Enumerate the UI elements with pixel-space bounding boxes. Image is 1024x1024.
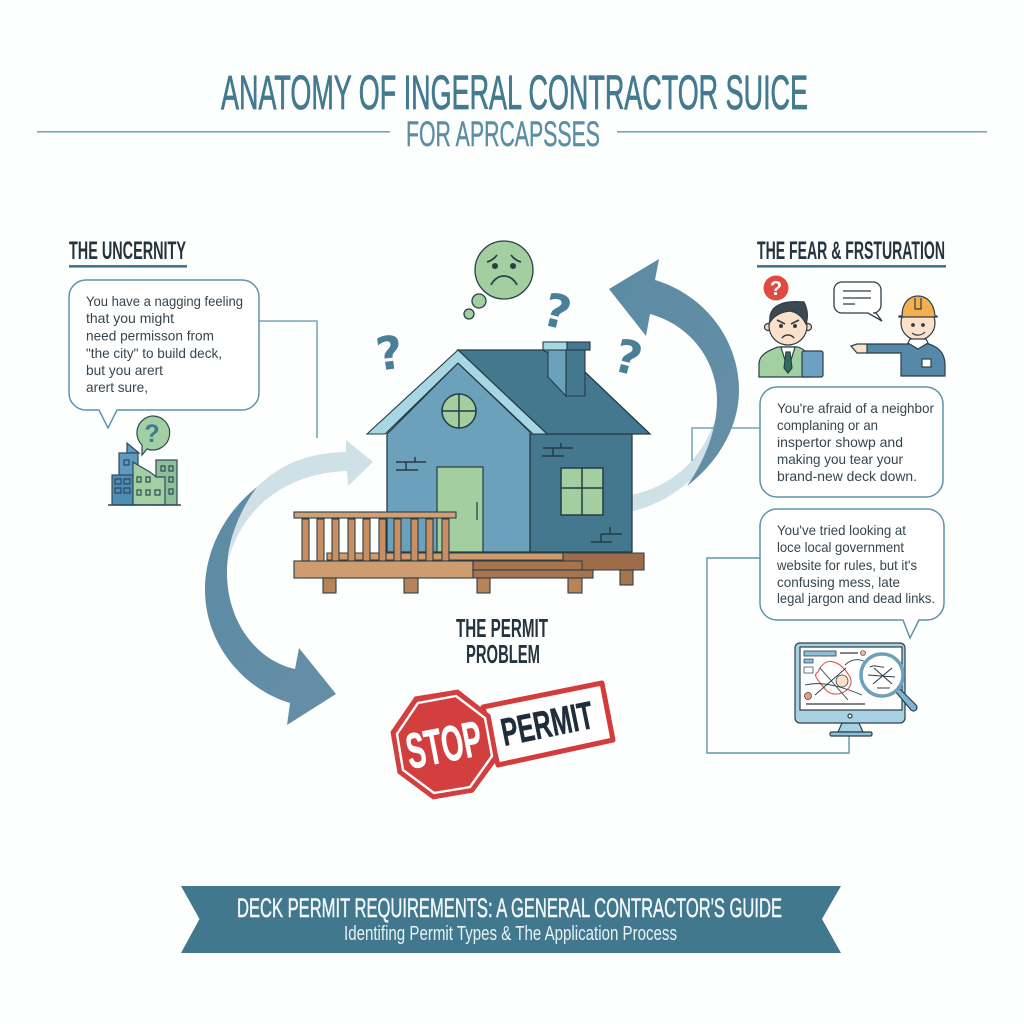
icon: question mark right: ? [609, 328, 648, 387]
text bubble: fear [760, 387, 943, 497]
round window [442, 394, 476, 428]
icon: city buildings with question [108, 416, 181, 505]
connector line [259, 321, 317, 438]
panel: the fear and frustration [692, 237, 946, 753]
bubble text: arert sure, [86, 379, 148, 395]
side wall [530, 434, 632, 552]
roof fascia [367, 350, 547, 434]
bubble text: need permisson from [86, 328, 214, 344]
icon: worried face thought [464, 241, 533, 319]
icon: red question badge: ? [770, 278, 782, 300]
bricks [396, 443, 622, 542]
speech bubble [69, 280, 259, 428]
bubble text: frustration [776, 522, 935, 606]
bubble text: that you might [86, 310, 174, 326]
permit stamp [483, 683, 613, 765]
bubble text: frustration: website for rules, but it's [776, 557, 917, 573]
center label: the permit problem: PROBLEM [466, 639, 540, 669]
icon: question mark left: ? [373, 325, 406, 382]
icon: monitor with magnifier [795, 643, 917, 736]
banner subtitle: Identifing Permit Types & The Application Process [344, 923, 677, 945]
center label: the permit problem [456, 613, 548, 669]
bubble text: fear: brand-new deck down. [777, 468, 917, 484]
arrow: light arrow to house [228, 440, 373, 563]
arrow: dark arrow to stop sign [205, 487, 336, 725]
icon: angry homeowner [759, 302, 823, 377]
bubble text: You have a nagging feeling [86, 293, 243, 309]
bottom banner [181, 886, 841, 953]
heading: the uncernity: THE UNCERNITY [69, 237, 186, 265]
icon: question mark middle: ? [538, 282, 577, 341]
icon: house with deck [294, 342, 650, 593]
speech bubble: frustration [760, 509, 944, 638]
door [437, 467, 483, 552]
arrow: dark arrow upward right [609, 259, 739, 486]
bubble text: but you arert [86, 362, 163, 378]
connector line [692, 428, 760, 461]
bubble text: fear [777, 400, 934, 484]
connector line [707, 558, 849, 753]
roof [458, 350, 650, 434]
icon: red question badge [764, 276, 788, 300]
subtitle: FOR APRCAPSSES [406, 115, 600, 154]
deck [294, 512, 644, 593]
icon: stop permit stamp [391, 683, 613, 799]
heading underline [69, 265, 187, 268]
chimney [543, 342, 590, 396]
center label: the permit problem: THE PERMIT [456, 613, 548, 643]
stop octagon inner ring [397, 696, 492, 793]
bubble text: fear: You're afraid of a neighbor [777, 400, 934, 416]
icon: inspector pointing [851, 296, 945, 376]
bubble text: fear: making you tear your [777, 451, 903, 467]
bubble text: frustration: legal jargon and dead links. [777, 590, 935, 606]
header divider right [617, 131, 987, 133]
heading underline [757, 265, 946, 268]
stop word: STOP [401, 710, 487, 780]
bubble text: frustration: confusing mess, late [777, 574, 900, 590]
panel: the uncertainty [69, 237, 317, 505]
ribbon shape [181, 886, 841, 953]
front wall [387, 363, 530, 552]
side window [561, 468, 603, 515]
bubble text: frustration: You've tried looking at [777, 522, 906, 538]
icon: city buildings with question: ? [144, 420, 160, 448]
stop octagon [391, 690, 498, 799]
icon: speech bubble with lines [834, 282, 882, 321]
bubble text: fear: inspertor showp and [777, 434, 903, 450]
bubble text: "the city" to build deck, [86, 345, 222, 361]
bubble text: frustration: loce local government [777, 539, 904, 555]
bubble text: fear: complaning or an [777, 417, 878, 433]
permit word: PERMIT [497, 694, 597, 755]
bubble text [86, 293, 243, 395]
arrow: light tail from house [625, 420, 725, 513]
header divider left [37, 131, 390, 133]
